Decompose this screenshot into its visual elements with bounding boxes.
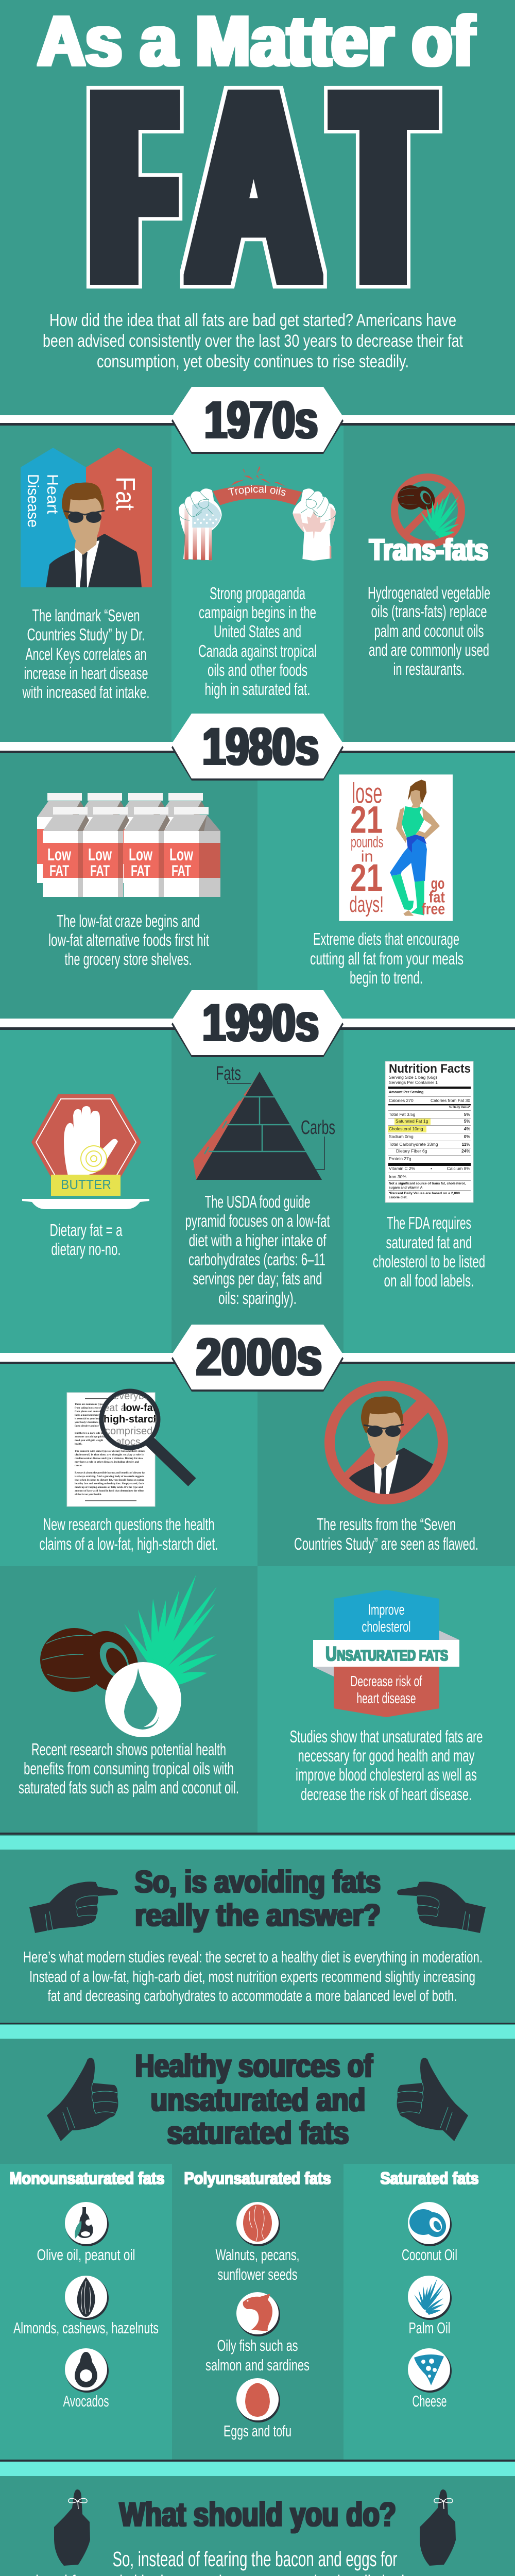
icon: stop hand and butter: [22, 1094, 149, 1209]
column: saturated fats: Cheese: [412, 2392, 447, 2410]
right fist with Canadian flag: [293, 488, 336, 561]
icon: diet poster: 21: [350, 799, 383, 841]
icon: research paper with magnifying glass: from plants and animals can be good: [75, 1411, 115, 1413]
chart: nutrition facts label: *Percent Daily Values are based on a 2,000: [389, 1192, 460, 1195]
text: low-fat craze: The low-fat craze begins and: [57, 911, 200, 930]
text: study seen as flawed: [294, 1515, 478, 1553]
chart: nutrition facts label: Nutrition Facts: [389, 1062, 471, 1076]
chart: food pyramid: Fats: [216, 1063, 241, 1084]
icon: walnut: [236, 2202, 280, 2246]
icon: research paper with magnifying glass: comprised of: [105, 1426, 164, 1437]
text: fda labels: [373, 1213, 485, 1290]
icon: heart disease and fat chart with man: Disease: [24, 474, 42, 528]
chart: nutrition facts label: 0%: [464, 1134, 470, 1139]
heading: healthy sources: unsaturated and: [150, 2082, 366, 2118]
icon: research paper with magnifying glass: d: [151, 1414, 157, 1425]
text: seven countries study: The landmark “Seven: [32, 606, 140, 625]
icon: research paper with magnifying glass: atocs, rice: [116, 1436, 163, 1448]
column: polyunsaturated fats: Oily fish such as: [217, 2336, 298, 2354]
chart: nutrition facts label: 5%: [464, 1118, 470, 1124]
woman figure: [390, 779, 440, 916]
icon: research paper with magnifying glass: may have a role in other diseases, including obesity and: [75, 1461, 139, 1464]
icon: research paper with magnifying glass: healthy fats and avoiding unhealthy fats. Simply stated, fat is: [75, 1483, 144, 1485]
icon: research paper with magnifying glass: cancer.: [75, 1465, 83, 1467]
text: propaganda campaign: Strong propaganda: [210, 584, 305, 603]
icon: low fat milk cartons: [37, 793, 220, 897]
chart: nutrition facts label: 24%: [461, 1148, 470, 1154]
icon: coconut: [408, 2202, 452, 2246]
column: polyunsaturated fats: Polyunsaturated fats: [184, 2169, 331, 2188]
icon: heart disease and fat chart with man: Heart: [44, 474, 62, 514]
big word FAT: A: [190, 37, 317, 337]
icon: unsaturated fats ribbon: cholesterol: [362, 1619, 411, 1635]
chart: nutrition facts label: Vitamin C 2%: [389, 1166, 416, 1171]
icon: research paper with magnifying glass: Research about the possible harms and benefits of dietary fat: [75, 1472, 145, 1475]
icon: low fat milk cartons: FAT: [131, 862, 150, 879]
icon: unsaturated fats ribbon: Improve: [368, 1602, 405, 1618]
chart: nutrition facts label: Calories 270: [389, 1098, 414, 1103]
icon: trans-fats no tropical oils: Trans-fats: [369, 533, 488, 567]
icon: avocado: [65, 2348, 109, 2393]
icon: research paper with magnifying glass: cardiovascular disease and type 2 diabetes. Dietary fat also: [75, 1458, 143, 1460]
icon: research paper with magnifying glass: fat is a macronutrient that: [75, 1414, 104, 1417]
icon: tropical oils fists: [179, 466, 336, 561]
text: usda pyramid: servings per day; fats and: [193, 1269, 322, 1288]
text: propaganda campaign: campaign begins in the: [199, 603, 316, 622]
chart: nutrition facts label: Serving Size 1 bag (66g): [389, 1075, 437, 1080]
chart: nutrition facts label: Total Carbohydrate 33mg: [389, 1142, 438, 1147]
icon: diet poster: [339, 774, 453, 921]
text: dietary no-no: [49, 1221, 123, 1259]
panel: what should you do: [0, 2460, 515, 2576]
icon: coconut, palm and oil drop: [40, 1574, 217, 1737]
text: usda pyramid: pyramid focuses on a low-fat: [185, 1211, 330, 1230]
heading: healthy sources: [135, 2048, 373, 2151]
text: tropical oil benefits: [19, 1740, 239, 1797]
text: hydrogenated oils: in restaurants.: [393, 659, 465, 679]
icon: unsaturated fats ribbon: Decrease risk of: [350, 1673, 422, 1690]
text: usda pyramid: oils: sparingly).: [218, 1289, 297, 1308]
icon: research paper with magnifying glass: health.: [75, 1443, 82, 1446]
icon: research paper with magnifying glass: everybody: [113, 1391, 161, 1402]
icon: diet poster: free: [421, 900, 445, 918]
column: monounsaturated fats: Olive oil, peanut oil: [37, 2246, 135, 2264]
text: propaganda campaign: oils and other foods: [208, 660, 307, 680]
chart: nutrition facts label: Iron 30%: [389, 1174, 406, 1179]
banner: 1980s: [0, 714, 515, 781]
icon: cheese: [408, 2348, 452, 2393]
text: usda pyramid: diet with a higher intake of: [188, 1231, 327, 1250]
icon: diet poster: pounds: [351, 833, 383, 851]
text: extreme diets: [310, 929, 464, 987]
icon: research paper with magnifying glass: cholesterol) is that they are thought to play a role in: [75, 1454, 144, 1456]
text: seven countries study: [22, 606, 149, 702]
column: polyunsaturated fats: sunflower seeds: [217, 2265, 298, 2283]
icon: research paper with magnifying glass: There are numerous types of fat that: [75, 1403, 115, 1406]
column: polyunsaturated fats: salmon and sardines: [205, 2356, 310, 2374]
icon: unsaturated fats ribbon: [313, 1590, 459, 1717]
text: usda pyramid: The USDA food guide: [205, 1192, 310, 1211]
big word FAT: [98, 36, 427, 337]
icon: research paper with magnifying glass: need, you will gain weight: [75, 1439, 103, 1442]
icon: diet poster: lose: [352, 776, 382, 809]
icon: low fat milk cartons: Low: [47, 845, 71, 864]
chart: nutrition facts label: [385, 1061, 473, 1202]
heading: so is avoiding fats: [135, 1865, 381, 1933]
panel: 1970s: [21, 426, 490, 742]
chart: nutrition facts label: Dietary Fiber 6g: [396, 1148, 427, 1154]
chart: food pyramid: [193, 1063, 335, 1180]
icon: research paper with magnifying glass: is always evolving. And a growing body of research suggests: [75, 1476, 144, 1478]
icon: unsaturated fats ribbon: heart disease: [356, 1690, 416, 1707]
text: dietary no-no: Dietary fat = a: [49, 1221, 123, 1240]
icon: research paper with magnifying glass: amounts can add up quickly: [75, 1436, 106, 1438]
panel: 1990s: [0, 1019, 515, 1353]
column: monounsaturated fats: Avocados: [63, 2392, 109, 2410]
icon: palm leaf: [408, 2276, 452, 2320]
chart: nutrition facts label: 11%: [461, 1142, 470, 1147]
icon: research paper with magnifying glass: of the fat on your health.: [75, 1494, 102, 1496]
column: monounsaturated fats: [9, 2169, 165, 2410]
chart: nutrition facts label: Calories from Fat 30: [431, 1098, 470, 1103]
icon: diet poster: 21: [350, 856, 383, 899]
icon: low fat milk cartons: FAT: [171, 862, 191, 879]
chart: nutrition facts label: Protein 27g: [389, 1156, 411, 1161]
column: saturated fats: Palm Oil: [409, 2319, 450, 2337]
banner: 1970s: 1970s: [204, 391, 318, 449]
heading: healthy sources: saturated fats: [167, 2115, 349, 2151]
chart: nutrition facts label: Not a significant source of trans fat, cholesterol,: [389, 1182, 466, 1185]
icon: fish: [236, 2292, 280, 2336]
icon: reminder finger right: [420, 2489, 456, 2566]
text: advice: [36, 2547, 469, 2576]
text: low-fat craze: [48, 911, 209, 969]
icon: research paper with magnifying glass: fat to dissolve and use: [75, 1425, 99, 1428]
icon: low fat milk cartons: FAT: [90, 862, 110, 879]
heading: so is avoiding fats: really the answer?: [135, 1898, 381, 1933]
chart: nutrition facts label: % Daily Value*: [449, 1106, 471, 1109]
banner: 1990s: 1990s: [202, 993, 319, 1052]
icon: research paper with magnifying glass: made up of varying amounts of fatty acids. It's the type and: [75, 1486, 143, 1489]
banner: 1980s: 1980s: [202, 717, 319, 776]
chart: nutrition facts label: sugars and vitamin A: [389, 1186, 423, 1190]
big word FAT: F: [98, 37, 168, 337]
text: low-fat craze: low-fat alternative foods first hit: [48, 930, 209, 950]
icon: egg: [236, 2378, 280, 2422]
icon: thumbs up right: [397, 2058, 468, 2141]
left fist with US flag: [179, 488, 222, 560]
text: unsaturated fats studies: [289, 1727, 483, 1804]
column: saturated fats: [380, 2169, 479, 2410]
icon: research paper with magnifying glass: high-starch: [104, 1414, 160, 1425]
text: seven countries study: Ancel Keys correlates an: [26, 645, 146, 664]
panel: 2000s: [0, 1353, 515, 1833]
text: extreme diets: begin to trend.: [350, 968, 423, 987]
text: propaganda campaign: [198, 584, 317, 699]
icon: research paper with magnifying glass: But there is a dark side to fat: [75, 1432, 107, 1435]
chart: nutrition facts label: Amount Per Serving: [389, 1091, 423, 1094]
text: hydrogenated oils: [368, 583, 490, 679]
icon: research paper with magnifying glass: from taking in excess of those that: [75, 1407, 112, 1410]
text: seven countries study: increase in heart disease: [24, 664, 148, 683]
icon: crossed-out man: [330, 1386, 443, 1501]
column: saturated fats: Coconut Oil: [402, 2246, 457, 2264]
text: tropical oil benefits: Recent research shows potential health: [31, 1740, 226, 1759]
icon: low fat milk cartons: Low: [88, 845, 112, 864]
text: modern studies: [23, 1948, 483, 2005]
heading: healthy sources: Healthy sources of: [135, 2048, 373, 2084]
chart: nutrition facts label: Saturated Fat 1g: [396, 1118, 428, 1124]
icon: pointing hand right: [397, 1882, 486, 1933]
icon: diet poster: in: [361, 848, 373, 866]
icon: almond: [65, 2276, 109, 2320]
icon: tropical oils fists: Tropical oils: [228, 485, 286, 496]
chart: nutrition facts label: Total Fat 3.5g: [389, 1112, 416, 1117]
chart: nutrition facts label: Calcium 8%: [447, 1166, 470, 1171]
text: usda pyramid: carbohydrates (carbs: 6–11: [188, 1250, 325, 1269]
icon: research paper with magnifying glass: is essential to your health: [75, 1418, 102, 1420]
banner: 1990s: [0, 990, 515, 1057]
title line: As a Matter of: [38, 2, 475, 81]
icon: unsaturated fats ribbon: UNSATURATED FATS: [325, 1643, 448, 1665]
text: seven countries study: Countries Study” by Dr.: [27, 625, 145, 644]
text: fda labels: on all food labels.: [384, 1271, 474, 1290]
intro text: [43, 311, 463, 371]
icon: research paper with magnifying glass: amount of fatty acid found in food that determines the effect: [75, 1490, 144, 1493]
chart: nutrition facts label: 5%: [464, 1112, 470, 1117]
icon: diet poster: days!: [349, 892, 384, 917]
chart: nutrition facts label: Servings Per Container 1: [389, 1080, 438, 1085]
icon: low fat milk cartons: Low: [169, 845, 193, 864]
heading: so is avoiding fats: So, is avoiding fats: [135, 1865, 381, 1899]
chart: nutrition facts label: Cholesterol 10mg: [389, 1126, 423, 1131]
icon: trans-fats no tropical oils: [369, 477, 488, 567]
banner: 2000s: [0, 1325, 515, 1392]
icon: heart disease and fat chart with man: [21, 448, 152, 587]
icon: research paper with magnifying glass: [67, 1391, 192, 1506]
text: tropical oil benefits: saturated fats such as palm and coconut oil.: [19, 1778, 239, 1797]
text: seven countries study: with increased fat intake.: [22, 683, 149, 702]
icon: stop hand and butter: BUTTER: [61, 1177, 111, 1192]
text: new research: New research questions the health: [43, 1515, 214, 1534]
chart: food pyramid: Carbs: [301, 1117, 335, 1139]
icon: research paper with magnifying glass: that when it comes to dietary fat, you should focus on eating: [75, 1479, 145, 1482]
column: monounsaturated fats: Almonds, cashews, hazelnuts: [13, 2319, 159, 2337]
icon: research paper with magnifying glass: The concern with some types of dietary fats and their sterols: [75, 1450, 145, 1453]
text: dietary no-no: dietary no-no.: [52, 1240, 121, 1259]
column: polyunsaturated fats: Eggs and tofu: [224, 2422, 291, 2440]
text: propaganda campaign: high in saturated fat.: [205, 680, 310, 699]
column: monounsaturated fats: Monounsaturated fats: [9, 2169, 165, 2188]
text: tropical oil benefits: benefits from consuming tropical oils with: [24, 1759, 234, 1778]
title: [38, 2, 475, 337]
text: usda pyramid: [185, 1192, 330, 1308]
icon: low fat milk cartons: Low: [129, 845, 152, 864]
icon: research paper with magnifying glass: your body's functions and help: [75, 1421, 109, 1424]
chart: nutrition facts label: 4%: [464, 1126, 470, 1131]
column: polyunsaturated fats: [184, 2169, 331, 2440]
icon: pointing hand left: [29, 1882, 118, 1933]
chart: nutrition facts label: •: [431, 1166, 432, 1171]
icon: thumbs up left: [47, 2058, 118, 2141]
big word FAT: T: [339, 36, 427, 337]
text: low-fat craze: the grocery store shelves.: [65, 950, 192, 969]
column: polyunsaturated fats: Walnuts, pecans,: [215, 2246, 300, 2264]
column: saturated fats: Saturated fats: [380, 2169, 479, 2188]
icon: research paper with magnifying glass: low-fat: [123, 1402, 157, 1414]
chart: nutrition facts label: Sodium 0mg: [389, 1134, 414, 1139]
text: propaganda campaign: Canada against tropical: [198, 641, 317, 660]
icon: low fat milk cartons: FAT: [49, 862, 69, 879]
icon: olive oil: [65, 2202, 109, 2246]
icon: diet poster: fat: [429, 889, 445, 906]
panel: is avoiding fats the answer: [0, 1833, 515, 2023]
text: new research: [39, 1515, 218, 1553]
chart: nutrition facts label: calorie diet.: [389, 1196, 407, 1199]
text: fda labels: saturated fat and: [386, 1233, 472, 1252]
banner: 1970s: [0, 387, 515, 454]
text: propaganda campaign: United States and: [214, 622, 301, 641]
panel: healthy sources: [0, 2023, 515, 2460]
heading: what should you do: What should you do?: [119, 2495, 396, 2533]
icon: diet poster: go: [431, 875, 444, 892]
intro text: consumption, yet obesity continues to rise steadily.: [97, 352, 409, 371]
icon: reminder finger left: [54, 2489, 90, 2566]
panel: 1980s: [0, 753, 515, 1019]
text: new research: claims of a low-fat, high-starch diet.: [39, 1534, 218, 1553]
banner: 2000s: 2000s: [196, 1328, 322, 1386]
icon: heart disease and fat chart with man: Fat: [110, 477, 140, 511]
icon: research paper with magnifying glass: eat a: [104, 1402, 127, 1414]
